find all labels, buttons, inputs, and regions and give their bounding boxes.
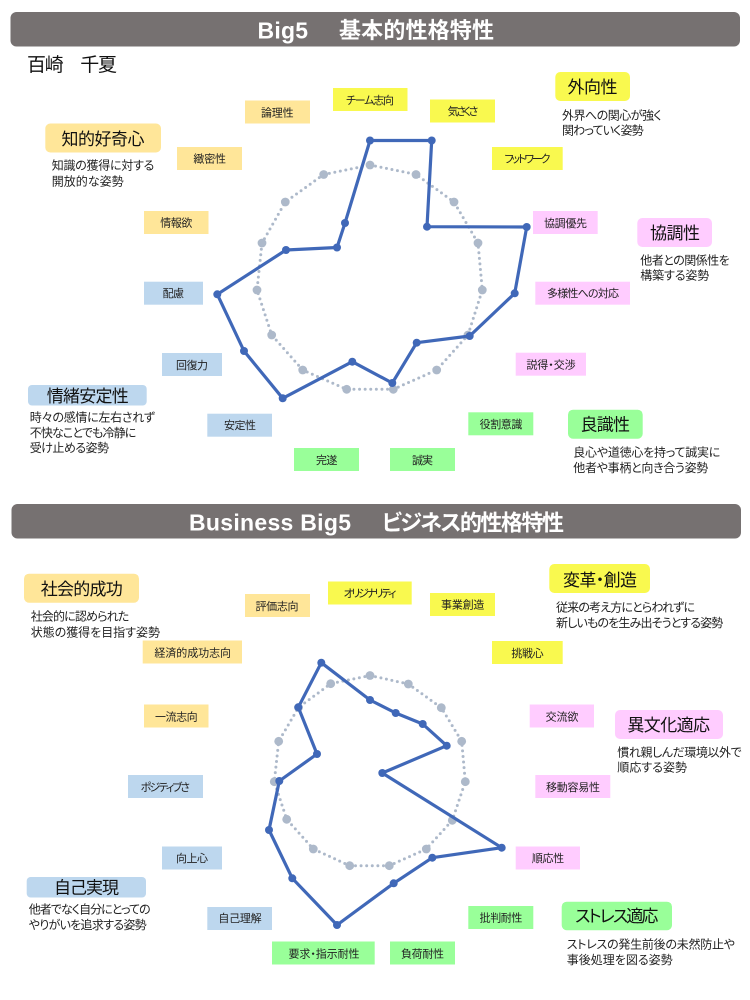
label: 一流志向: 一流志向: [155, 710, 198, 724]
label: フットワーク: [492, 147, 563, 170]
label: 経済的成功志向: [143, 640, 242, 664]
label: ポジティブさ: [128, 775, 203, 798]
label: 移動容易性: [535, 775, 610, 798]
label: 多様性への対応: [535, 282, 630, 305]
label: 回復力: [162, 353, 222, 376]
category: 良識性: 良識性: [581, 415, 630, 434]
label: 交流欲: [530, 704, 594, 728]
category: 社会的成功: 社会的成功: [41, 580, 123, 599]
heading: Big5: 基本的性格特性: [339, 18, 494, 43]
label: 協調優先: 協調優先: [544, 217, 587, 230]
label: 評価志向: [245, 594, 310, 617]
label: 要求・指示耐性: 要求・指示耐性: [288, 947, 360, 961]
category: 知的好奇心: [45, 124, 161, 188]
label: チーム志向: [333, 88, 408, 111]
category: 外向性: 外向性: [568, 78, 618, 97]
label: 気さくさ: [430, 100, 495, 122]
category: 協調性: 構築する姿勢: [640, 267, 709, 282]
category: 異文化適応: 順応する姿勢: [617, 759, 687, 774]
label: 向上心: 向上心: [176, 851, 208, 865]
label: オリジナリティ: [328, 582, 412, 604]
category: 協調性: [637, 218, 730, 282]
personal score solid line: [213, 136, 531, 402]
label: 負荷耐性: 負荷耐性: [401, 947, 444, 961]
category: 自己実現: [27, 877, 151, 932]
average profile dotted line: [270, 671, 470, 870]
person name: 百崎 千夏: [27, 54, 117, 76]
category: 情緒安定性: 受け止める姿勢: [30, 440, 109, 455]
label: 緻密性: 緻密性: [193, 152, 226, 166]
category: ストレス適応: [562, 902, 735, 967]
category: 良識性: 良心や道徳心を持って誠実に: [573, 444, 720, 459]
label: 事業創造: 事業創造: [441, 598, 484, 612]
category: ストレス適応: 事後処理を図る姿勢: [567, 952, 673, 967]
label: ポジティブさ: ポジティブさ: [141, 780, 190, 794]
category: 情緒安定性: 不快なことでも冷静に: [30, 426, 136, 440]
label: 挑戦心: [492, 641, 563, 664]
label: 説得・交渉: [516, 353, 586, 376]
category: 知的好奇心: 知的好奇心: [62, 130, 144, 149]
label: 順応性: [516, 846, 580, 870]
category: 自己実現: 自己実現: [54, 878, 119, 897]
label: 協調優先: [533, 211, 598, 234]
category: 異文化適応: 慣れ親しんだ環境以外で: [617, 744, 742, 759]
label: 自己理解: 自己理解: [218, 911, 262, 925]
label: 要求・指示耐性: [272, 942, 375, 964]
label: 配慮: [144, 282, 203, 305]
average profile dotted line: [253, 161, 487, 394]
category: 自己実現: 他者でなく自分にとっての: [29, 903, 151, 917]
category: 協調性: 協調性: [650, 224, 700, 243]
label: 挑戦心: 挑戦心: [511, 646, 544, 660]
category: ストレス適応: ストレスの発生前後の未然防止や: [567, 937, 735, 952]
label: 完遂: [294, 448, 359, 471]
label: チーム志向: チーム志向: [346, 93, 394, 107]
label: 情報欲: [144, 211, 208, 234]
label: 完遂: 完遂: [316, 454, 337, 467]
heading: Business Big5: Business Big5: [189, 510, 351, 536]
label: 回復力: 回復力: [176, 359, 208, 372]
radar chart: Business Big5: [265, 659, 506, 929]
category: 社会的成功: [24, 574, 160, 639]
personal score solid line: [265, 659, 506, 929]
category: 変革・創造: 従来の考え方にとらわれずに: [556, 600, 695, 615]
label: 論理性: 論理性: [261, 106, 294, 120]
heading: Big5: [10, 12, 740, 46]
category: 外向性: [555, 72, 662, 137]
label: 批判耐性: 批判耐性: [480, 911, 522, 925]
category: 知的好奇心: 知識の獲得に対する: [52, 157, 154, 172]
label: 向上心: [162, 846, 222, 870]
label: オリジナリティ: オリジナリティ: [343, 587, 396, 600]
radar chart: Big5: [213, 136, 531, 402]
label: 論理性: [245, 100, 310, 124]
heading: Business Big5: [12, 504, 741, 538]
label: 自己理解: [207, 907, 272, 930]
category: 社会的成功: 社会的に認められた: [31, 609, 129, 624]
category: 異文化適応: [615, 710, 742, 774]
label: 負荷耐性: [390, 942, 455, 964]
category: 情緒安定性: 情緒安定性: [47, 387, 129, 406]
label: 批判耐性: [468, 906, 533, 929]
label: 評価志向: 評価志向: [256, 599, 298, 613]
label: 順応性: 順応性: [532, 851, 564, 865]
label: 移動容易性: 移動容易性: [546, 780, 600, 794]
category: 外向性: 外界への関心が強く: [562, 107, 662, 122]
label: 安定性: 安定性: [224, 418, 256, 432]
label: 安定性: [207, 414, 272, 437]
category: 変革・創造: 変革・創造: [563, 571, 637, 590]
category: 変革・創造: 新しいものを生み出そうとする姿勢: [556, 615, 723, 630]
label: 緻密性: [177, 147, 242, 170]
label: 経済的成功志向: 経済的成功志向: [154, 646, 231, 660]
category: 情緒安定性: [28, 385, 156, 455]
label: 交流欲: 交流欲: [546, 710, 578, 724]
label: 一流志向: [144, 704, 208, 728]
category: 自己実現: やりがいを追求する姿勢: [28, 917, 147, 932]
category: 情緒安定性: 時々の感情に左右されず: [30, 410, 156, 425]
label: フットワーク: フットワーク: [504, 153, 550, 166]
heading: Business Big5: ビジネス的性格特性: [382, 510, 564, 536]
category: 社会的成功: 状態の獲得を目指す姿勢: [31, 624, 160, 639]
category: 異文化適応: 異文化適応: [627, 716, 710, 735]
label: 役割意識: [468, 412, 533, 435]
label: 情報欲: 情報欲: [160, 216, 192, 230]
panel: Business Big5 personality traits: [12, 504, 742, 967]
label: 役割意識: 役割意識: [480, 417, 522, 431]
label: 事業創造: [430, 593, 495, 616]
category: 良識性: 他者や事柄と向き合う姿勢: [573, 460, 708, 475]
category: 知的好奇心: 開放的な姿勢: [52, 173, 124, 188]
panel: Big5 basic personality traits: [10, 12, 740, 475]
label: 説得・交渉: 説得・交渉: [526, 358, 576, 372]
category: 外向性: 関わっていく姿勢: [562, 122, 644, 137]
category: 変革・創造: [549, 564, 723, 630]
category: 協調性: 他者との関係性を: [640, 253, 730, 267]
label: 配慮: 配慮: [163, 286, 184, 300]
label: 多様性への対応: 多様性への対応: [547, 286, 619, 300]
heading: Big5: Big5: [258, 17, 308, 43]
label: 誠実: [390, 448, 455, 471]
label: 気さくさ: 気さくさ: [448, 104, 478, 118]
category: 良識性: [568, 410, 720, 475]
label: 誠実: 誠実: [412, 454, 433, 467]
category: ストレス適応: ストレス適応: [575, 907, 658, 926]
